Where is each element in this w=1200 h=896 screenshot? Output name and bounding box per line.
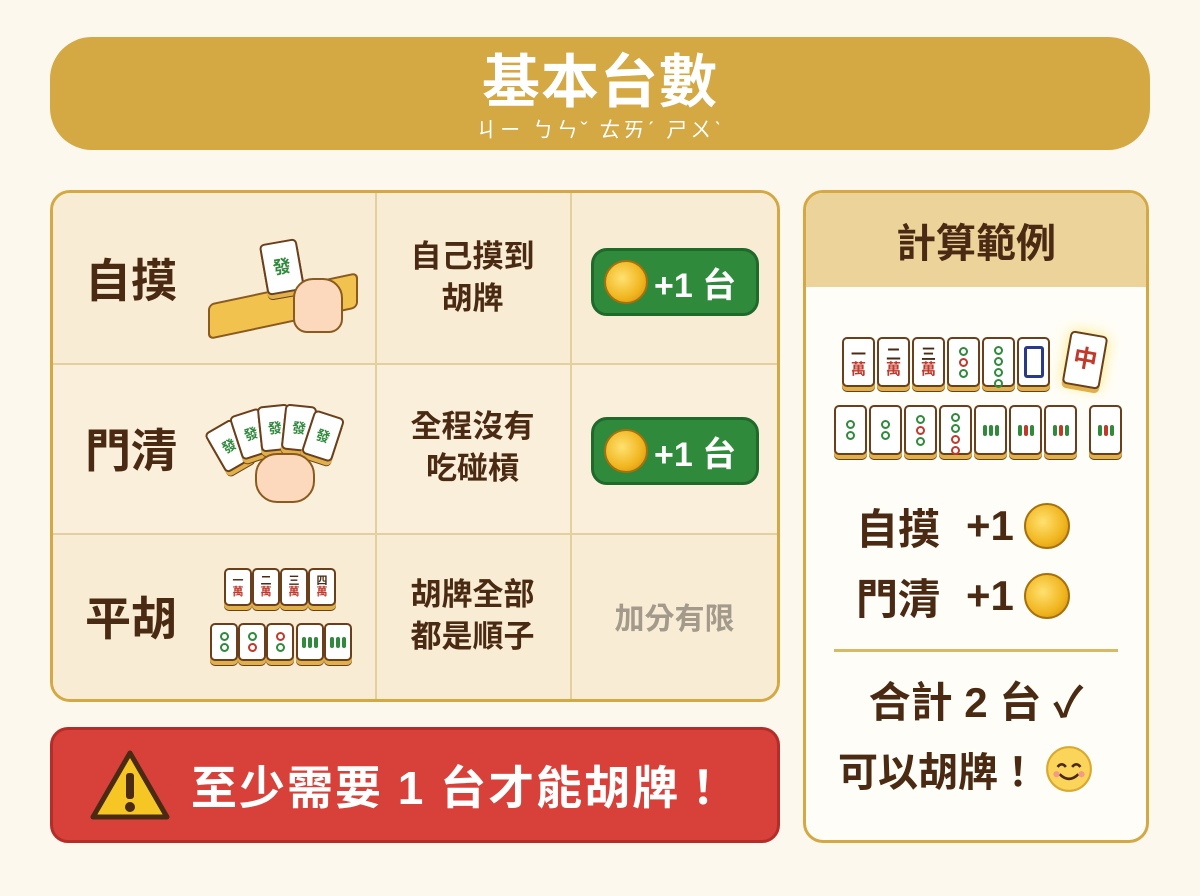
- example hand tiles: 萬: [851, 361, 866, 378]
- total: 合計 2 台: 合計 2 台 ✓: [869, 679, 1083, 726]
- icon: hand of tiles: [206, 404, 344, 503]
- icon: hand of tiles: 發: [267, 419, 283, 437]
- badge: +1 台: [591, 417, 759, 485]
- icon: sequence tiles: 三: [288, 575, 300, 587]
- line: 門清 +1: 門清: [856, 576, 940, 622]
- description: 全程沒有吃碰槓: 吃碰槓: [426, 451, 519, 486]
- warning text: 至少需要 1 台才能胡牌！: [191, 762, 728, 814]
- example hand tiles: 萬: [886, 361, 901, 378]
- badge: +1 台: [591, 248, 759, 316]
- icon: hand picking tile: 發: [271, 256, 293, 278]
- icon: sequence tiles: 萬: [260, 586, 272, 598]
- example hand tiles: [834, 322, 1122, 460]
- icon: hand of tiles: 發: [314, 426, 332, 446]
- row label: 自摸: 自摸: [85, 255, 177, 307]
- description: 胡牌全部都是順子: [410, 577, 534, 654]
- panel header: 計算範例: [896, 222, 1056, 266]
- result: 可以胡牌 with smiley: 可以胡牌！: [838, 751, 1038, 795]
- icon: hand of tiles: 發: [219, 436, 239, 456]
- icon: hand picking tile: [208, 238, 358, 339]
- description: 自己摸到胡牌: 胡牌: [442, 281, 504, 316]
- icon: sequence tiles: [210, 568, 352, 666]
- example hand tiles: 一: [851, 346, 866, 363]
- badge: +1 台: +1 台: [654, 266, 736, 304]
- example hand tiles: 三: [921, 346, 936, 363]
- description: 全程沒有吃碰槓: [410, 409, 534, 486]
- example hand tiles: 二: [886, 346, 901, 363]
- icon: sequence tiles: 四: [316, 575, 328, 587]
- icon: sequence tiles: 萬: [232, 586, 244, 598]
- bopomofo subtitle: ㄐㄧ ㄅㄣˇ ㄊㄞˊ ㄕㄨˋ: [476, 119, 724, 142]
- example hand tiles: 萬: [921, 361, 936, 378]
- panel: scoring table: [50, 190, 780, 702]
- icon: sequence tiles: 萬: [288, 586, 300, 598]
- line: 門清 +1: [856, 572, 1070, 622]
- icon: hand of tiles: 發: [242, 424, 260, 444]
- line: 自摸 +1: [856, 502, 1070, 552]
- description: 胡牌全部都是順子: 都是順子: [410, 619, 534, 654]
- warning banner: [50, 727, 780, 843]
- line: 門清 +1: +1: [966, 572, 1014, 619]
- icon: sequence tiles: 一: [232, 575, 244, 587]
- icon: sequence tiles: 萬: [316, 586, 328, 598]
- description: 胡牌全部都是順子: 胡牌全部: [410, 577, 534, 612]
- description: 自己摸到胡牌: [410, 239, 534, 316]
- title text: 基本台數: [482, 50, 718, 115]
- description: 全程沒有吃碰槓: 全程沒有: [410, 409, 534, 444]
- row label: 平胡: 平胡: [85, 593, 177, 645]
- line: 自摸 +1: 自摸: [856, 506, 940, 552]
- example hand tiles: 中: [1071, 344, 1099, 375]
- description: 自己摸到胡牌: 自己摸到: [410, 239, 534, 274]
- note: 加分有限: 加分有限: [614, 603, 734, 636]
- title banner: [50, 37, 1150, 150]
- icon: hand of tiles: 發: [291, 419, 307, 437]
- panel header: [806, 193, 1146, 287]
- line: 自摸 +1: +1: [966, 502, 1014, 549]
- icon: sequence tiles: 二: [260, 575, 272, 587]
- badge: +1 台: +1 台: [654, 436, 736, 474]
- panel: calculation example: [803, 190, 1149, 843]
- icon: warning triangle: [90, 750, 170, 820]
- row label: 門清: 門清: [85, 425, 177, 477]
